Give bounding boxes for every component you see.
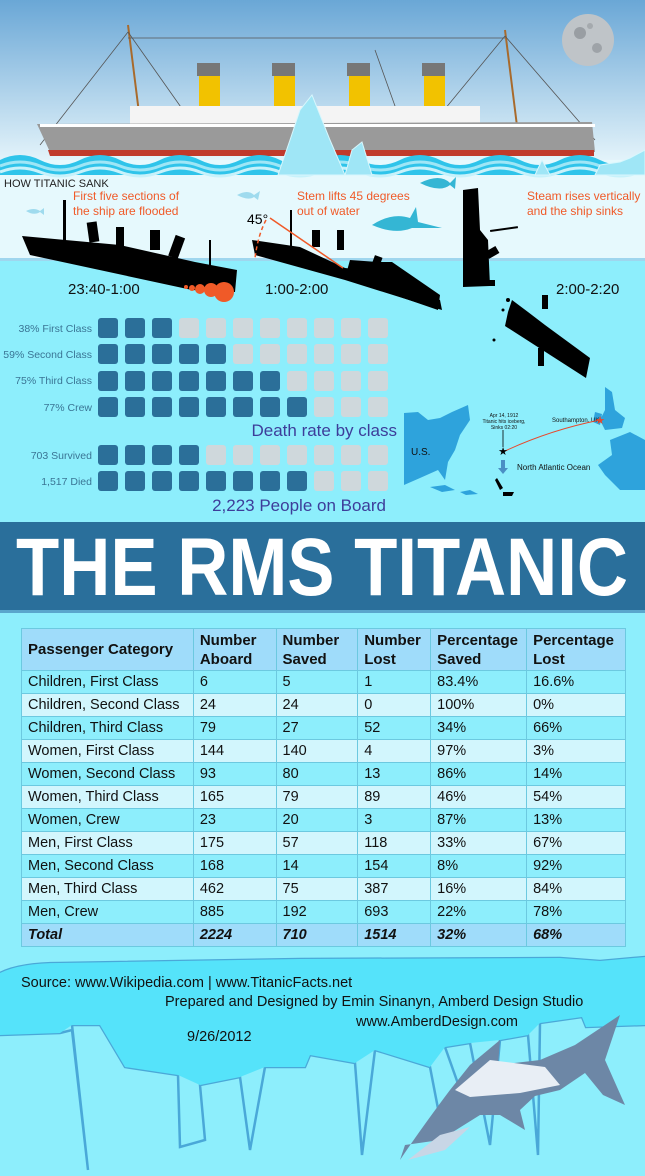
icon: shark xyxy=(400,1015,625,1160)
table: passenger statistics: 1514 xyxy=(364,927,396,943)
table: passenger statistics: 154 xyxy=(364,858,388,874)
table: passenger statistics: Saved xyxy=(283,650,327,668)
text: stage captions: First five sections of xyxy=(73,189,180,203)
table: passenger statistics: Women, Third Class xyxy=(28,789,159,805)
table: passenger statistics: 16.6% xyxy=(533,674,574,690)
table: passenger statistics: 32% xyxy=(437,927,466,943)
angle marker: 45° xyxy=(247,211,268,227)
text: class labels xyxy=(3,323,92,488)
text: time labels: 1:00-2:00 xyxy=(265,281,328,298)
table: passenger statistics: 710 xyxy=(283,927,307,943)
text: footer credits: 9/26/2012 xyxy=(187,1029,252,1045)
table: passenger statistics: 89 xyxy=(364,789,380,805)
table: passenger statistics: 3 xyxy=(364,812,372,828)
icon: fish xyxy=(26,177,456,231)
illustration: top scene xyxy=(0,0,645,515)
table: passenger statistics: 93 xyxy=(200,766,216,782)
table: passenger statistics: Percentage xyxy=(533,632,614,648)
table: passenger statistics: 46% xyxy=(437,789,466,805)
table: passenger statistics: 693 xyxy=(364,904,388,920)
table: passenger statistics: 66% xyxy=(533,720,562,736)
text: class labels: 59% Second Class xyxy=(3,349,92,361)
table: passenger statistics: 34% xyxy=(437,720,466,736)
table: passenger statistics: 83.4% xyxy=(437,674,478,690)
table: passenger statistics: Passenger Category xyxy=(28,641,173,658)
map: north atlantic: North Atlantic Ocean xyxy=(517,463,590,472)
illustration: sinking stage 2 xyxy=(252,210,442,310)
text: people on board: 2,223 People on Board xyxy=(212,496,386,515)
table: passenger statistics: Children, Second Class xyxy=(28,697,180,713)
text: stage captions: Steam rises vertically xyxy=(527,189,640,203)
map: north atlantic: Sinks 02:20 xyxy=(491,425,517,431)
illustration: sinking stage 3 xyxy=(463,188,590,378)
illustration: sinking stage 1 xyxy=(22,200,237,292)
table: passenger statistics: Women, Second Class xyxy=(28,766,175,782)
table: passenger statistics: 87% xyxy=(437,812,466,828)
chart: death rate squares xyxy=(98,318,388,417)
table: passenger statistics: 27 xyxy=(283,720,299,736)
table: passenger statistics: Children, Third Class xyxy=(28,720,163,736)
table: passenger statistics: 192 xyxy=(283,904,307,920)
text: class labels: 38% First Class xyxy=(18,323,92,335)
table: passenger statistics: Men, First Class xyxy=(28,835,133,851)
table: passenger statistics: 75 xyxy=(283,881,299,897)
illustration: titanic ship xyxy=(37,25,595,156)
map: north atlantic: ★ xyxy=(498,446,508,458)
table: passenger statistics: 24 xyxy=(200,697,216,713)
table: passenger statistics: 1 xyxy=(364,674,372,690)
table: passenger statistics: 387 xyxy=(364,881,388,897)
table: passenger statistics: 67% xyxy=(533,835,562,851)
table: passenger statistics: 97% xyxy=(437,743,466,759)
table: passenger statistics: 84% xyxy=(533,881,562,897)
table: passenger statistics: 86% xyxy=(437,766,466,782)
table: passenger statistics: Number xyxy=(200,632,257,648)
chart: survived vs died squares xyxy=(98,445,388,491)
text: class labels: 1,517 Died xyxy=(41,476,92,488)
table: passenger statistics: 80 xyxy=(283,766,299,782)
text: time labels xyxy=(68,281,619,298)
table: passenger statistics: 33% xyxy=(437,835,466,851)
map: north atlantic xyxy=(404,387,645,496)
table: passenger statistics: Women, First Class xyxy=(28,743,154,759)
table: passenger statistics: 118 xyxy=(364,835,387,851)
table: passenger statistics: Men, Third Class xyxy=(28,881,137,897)
table: passenger statistics: Women, Crew xyxy=(28,812,120,828)
text: stage captions xyxy=(73,189,640,218)
table: passenger statistics: 885 xyxy=(200,904,224,920)
table: passenger statistics: 144 xyxy=(200,743,224,759)
table: passenger statistics: 3% xyxy=(533,743,554,759)
map: north atlantic: Titanic hits iceberg, xyxy=(483,419,525,425)
table: passenger statistics: 13 xyxy=(364,766,380,782)
table: passenger statistics: 16% xyxy=(437,881,466,897)
illustration: ice footer xyxy=(0,956,645,1170)
text: time labels: 2:00-2:20 xyxy=(556,281,619,298)
table: passenger statistics: 100% xyxy=(437,697,474,713)
table: passenger statistics: 0 xyxy=(364,697,372,713)
table: passenger statistics: 79 xyxy=(283,789,299,805)
map: north atlantic: U.S. xyxy=(411,447,430,458)
table: passenger statistics: 168 xyxy=(200,858,224,874)
table: passenger statistics: Percentage xyxy=(437,632,518,648)
table: passenger statistics: Saved xyxy=(437,650,481,668)
table: passenger statistics: Number xyxy=(283,632,339,648)
text: class labels: 75% Third Class xyxy=(15,375,92,387)
table: passenger statistics: 79 xyxy=(200,720,216,736)
text: death rate by class: Death rate by class xyxy=(251,421,397,440)
table: passenger statistics: Aboard xyxy=(200,650,252,668)
table: passenger statistics: 14 xyxy=(283,858,299,874)
text: class labels: 77% Crew xyxy=(44,402,92,414)
table: passenger statistics: 165 xyxy=(200,789,224,805)
text: how titanic sank: HOW TITANIC SANK xyxy=(4,178,109,190)
text: stage captions: the ship are flooded xyxy=(73,204,178,218)
table: passenger statistics: 13% xyxy=(533,812,562,828)
table: passenger statistics: 0% xyxy=(533,697,554,713)
table: passenger statistics: 57 xyxy=(283,835,299,851)
table: passenger statistics: 14% xyxy=(533,766,562,782)
icon: iceberg xyxy=(278,95,645,175)
table: passenger statistics: 140 xyxy=(283,743,307,759)
table: passenger statistics: 54% xyxy=(533,789,562,805)
table: passenger statistics: 92% xyxy=(533,858,562,874)
table: passenger statistics: 78% xyxy=(533,904,562,920)
table: passenger statistics: 8% xyxy=(437,858,458,874)
table: passenger statistics: 462 xyxy=(200,881,224,897)
text: footer credits: www.AmberdDesign.com xyxy=(356,1014,518,1030)
table: passenger statistics: 52 xyxy=(364,720,380,736)
angle marker xyxy=(247,211,343,268)
table: passenger statistics: Lost xyxy=(533,650,565,668)
map: north atlantic: Apr 14, 1912 xyxy=(490,413,519,419)
table: passenger statistics: Men, Crew xyxy=(28,904,98,920)
table: passenger statistics: Men, Second Class xyxy=(28,858,154,874)
table: passenger statistics: 4 xyxy=(364,743,372,759)
text: time labels: 23:40-1:00 xyxy=(68,281,140,298)
table: passenger statistics: 24 xyxy=(283,697,299,713)
map: north atlantic: ★ xyxy=(595,415,605,427)
waves xyxy=(0,155,645,176)
text: footer credits: Source: www.Wikipedia.com | www.TitanicFacts.net xyxy=(21,975,352,991)
table: passenger statistics: Total xyxy=(28,927,62,943)
table: passenger statistics: 20 xyxy=(283,812,299,828)
table: passenger statistics: 68% xyxy=(533,927,562,943)
text: class labels: 703 Survived xyxy=(31,450,92,462)
map: north atlantic: Southampton, UK xyxy=(552,418,599,424)
table: passenger statistics: Number xyxy=(364,632,421,648)
table: passenger statistics: 5 xyxy=(283,674,291,690)
table: passenger statistics: Lost xyxy=(364,650,396,668)
text: stage captions: Stem lifts 45 degrees xyxy=(297,189,410,203)
table: passenger statistics: 22% xyxy=(437,904,466,920)
table: passenger statistics xyxy=(21,628,626,947)
text: footer credits: Prepared and Designed by Emin Sinanyn, Amberd Design Studio xyxy=(165,994,583,1010)
icon: bubbles xyxy=(184,282,234,302)
text: stage captions: and the ship sinks xyxy=(527,204,623,218)
table: passenger statistics: Children, First Class xyxy=(28,674,159,690)
table: passenger statistics: 23 xyxy=(200,812,216,828)
icon: moon xyxy=(562,14,614,66)
text: stage captions: out of water xyxy=(297,204,360,218)
table: passenger statistics: 2224 xyxy=(200,927,232,943)
table: passenger statistics: 175 xyxy=(200,835,224,851)
table: passenger statistics: 6 xyxy=(200,674,208,690)
